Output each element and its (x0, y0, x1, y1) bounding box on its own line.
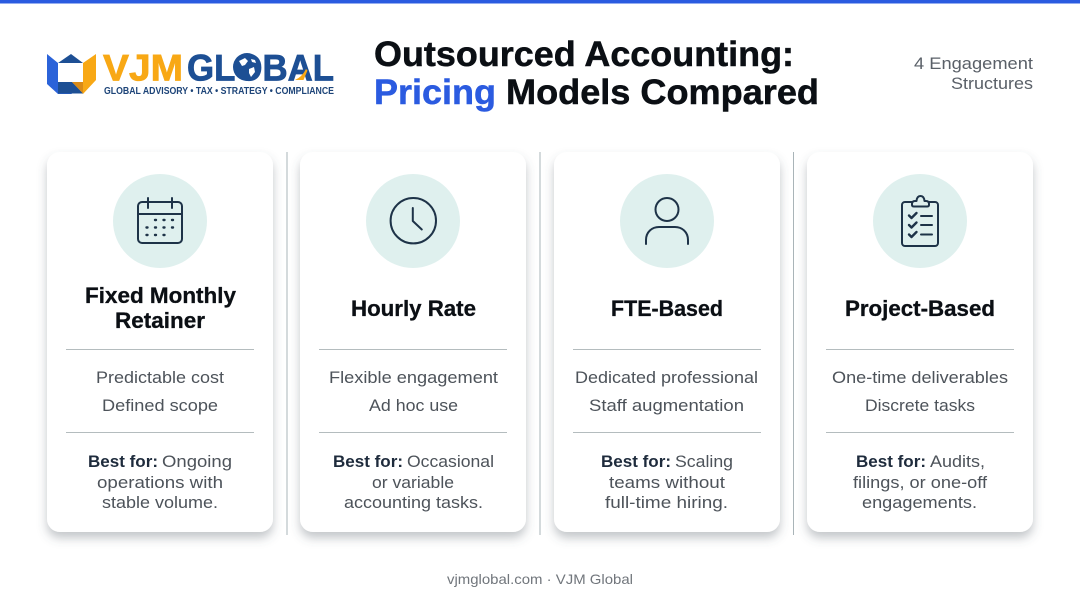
divider (826, 349, 1014, 350)
features: Ad hoc use (369, 396, 458, 415)
subtitle: 4 Engagement Structures (914, 54, 1033, 93)
panel: FTE-Based (554, 152, 780, 532)
subtitle: 4 Engagement Structures: Structures (951, 74, 1033, 93)
divider (319, 432, 507, 433)
heading: Project-Based (845, 296, 995, 321)
title (374, 35, 819, 112)
divider (66, 349, 254, 350)
features: Discrete tasks (865, 396, 975, 415)
subtitle: 4 Engagement Structures: 4 Engagement (914, 54, 1033, 73)
panel: Hourly Rate (300, 152, 526, 532)
divider (573, 432, 761, 433)
footer: vjmglobal.com · VJM Global (447, 571, 633, 587)
features: Staff augmentation (589, 396, 744, 415)
icon: clipboard checklist (873, 174, 967, 268)
features: Predictable cost (96, 368, 224, 387)
column divider 1 (286, 152, 288, 535)
divider (66, 432, 254, 433)
best for: operations with (97, 473, 223, 492)
top accent bar (0, 0, 1080, 4)
heading: Retainer (115, 308, 205, 333)
column divider 2 (540, 152, 541, 535)
best for: accounting tasks. (344, 493, 483, 512)
best for (333, 452, 494, 512)
features (96, 368, 224, 415)
divider (826, 432, 1014, 433)
best for: full-time hiring. (605, 493, 728, 512)
best for: Ongoing (162, 452, 232, 471)
best for: Occasional (407, 452, 494, 471)
title: Pricing (374, 73, 496, 112)
best for: Best for: (601, 452, 671, 471)
logo: VJM Global: GLOBAL ADVISORY • TAX • STRATEGY • COMPLIANCE (104, 85, 334, 97)
panel: Fixed Monthly Retainer (47, 152, 273, 532)
features: Dedicated professional (575, 368, 758, 387)
logo: VJM Global (47, 48, 334, 97)
heading: FTE-Based (611, 296, 723, 321)
features (575, 368, 758, 415)
logo: VJM Global: VJM (103, 48, 183, 88)
best for: engagements. (862, 493, 977, 512)
best for: Best for: (88, 452, 158, 471)
best for: filings, or one-off (853, 473, 987, 492)
features (832, 368, 1008, 415)
best for: Audits, (930, 452, 985, 471)
heading (85, 283, 237, 333)
icon: person (620, 174, 714, 268)
panel: Project-Based (807, 152, 1033, 532)
best for: Scaling (675, 452, 733, 471)
best for: Best for: (333, 452, 403, 471)
features: Defined scope (102, 396, 218, 415)
features (329, 368, 498, 415)
best for: stable volume. (102, 493, 218, 512)
best for: or variable (372, 473, 454, 492)
best for (88, 452, 232, 512)
heading: Hourly Rate (351, 296, 476, 321)
divider (573, 349, 761, 350)
icon: clock (366, 174, 460, 268)
title: Outsourced Accounting: (374, 35, 794, 74)
features: One-time deliverables (832, 368, 1008, 387)
logo: VJM Global: GLOBAL (187, 48, 334, 88)
best for: Best for: (856, 452, 926, 471)
features: Flexible engagement (329, 368, 498, 387)
best for (853, 452, 987, 512)
column divider 3 (793, 152, 794, 535)
heading: Fixed Monthly (85, 283, 237, 308)
divider (319, 349, 507, 350)
best for: teams without (609, 473, 725, 492)
icon: calendar (113, 174, 207, 268)
title: Models Compared (506, 73, 819, 112)
best for (601, 452, 733, 512)
